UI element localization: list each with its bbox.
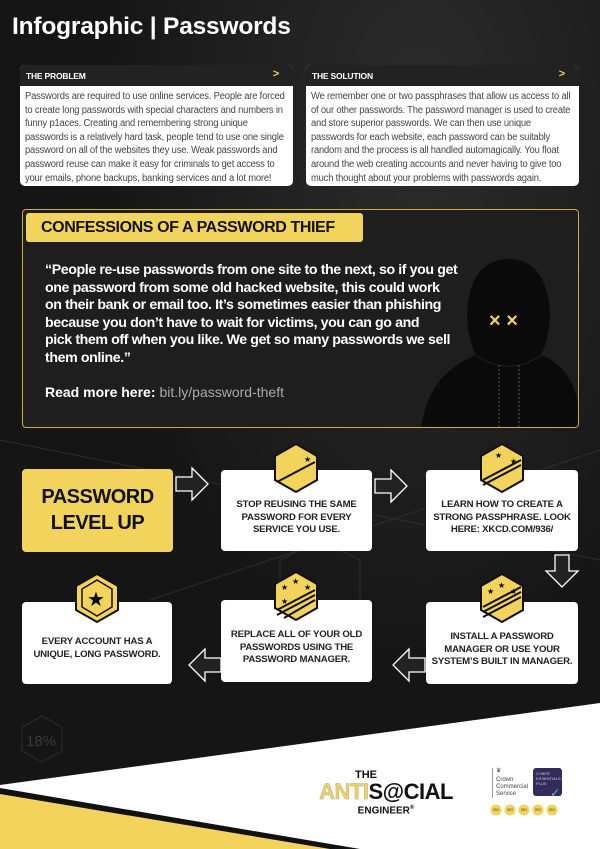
badge 3: ★ (498, 581, 505, 590)
step 5: EVERY ACCOUNT HAS A (42, 636, 152, 647)
problem header: > (273, 68, 279, 80)
problem text (25, 91, 285, 184)
read more link: Read more here: bit.ly/password-theft (45, 384, 284, 400)
step 5: UNIQUE, LONG PASSWORD. (33, 648, 161, 660)
badge 4: ★ (281, 597, 288, 606)
solution text: We remember one or two passphrases that allow us access to all (311, 91, 570, 102)
quote text (45, 262, 458, 366)
quote text: on their bank or email too. It’s sometimes easier than phishing (45, 297, 441, 313)
quote text: “People re-use passwords from one site to the next, so if you get (45, 262, 457, 278)
solution header: THE SOLUTION (312, 71, 373, 81)
step 1 (221, 470, 372, 551)
step 3: INSTALL A PASSWORD (450, 631, 554, 642)
iso badges: ISO (535, 808, 541, 812)
logo: cyber essentials plus (533, 768, 562, 796)
problem text: passwords is a relatively hard task, people tend to use one single (25, 132, 284, 143)
problem text: to create long passwords with special characters and numbers in (25, 105, 283, 116)
logo: crown commercial service: ♛ (496, 768, 501, 774)
badge 4: ★ (292, 577, 299, 586)
badge 2 (481, 444, 523, 492)
badge 3: ★ (510, 587, 517, 596)
confession heading (26, 213, 363, 242)
solution text: much thought about your problems with passwords again. (311, 173, 541, 184)
password level up box: LEVEL UP (51, 512, 144, 534)
title: Infographic | Passwords (12, 13, 291, 40)
logo: the antisocial engineer: ANTIS@CIAL (319, 779, 453, 804)
step 1: STOP REUSING THE SAME (236, 499, 357, 510)
arrow left 2 (189, 649, 221, 681)
problem text: password on all of the websites they use. Weak passwords and (25, 145, 277, 156)
badge 2: ★ (510, 457, 517, 466)
step 4: REPLACE ALL OF YOUR OLD (231, 629, 362, 640)
step 3: SYSTEM’S BUILT IN MANAGER. (432, 656, 572, 667)
badge 4 (275, 572, 317, 620)
step 2: LEARN HOW TO CREATE A (441, 499, 563, 510)
step 1: PASSWORD FOR EVERY (242, 512, 351, 522)
step 5 (22, 602, 172, 684)
confession heading: CONFESSIONS OF A PASSWORD THIEF (41, 219, 335, 236)
problem header: THE PROBLEM (26, 71, 86, 81)
solution text: random and the process is all handled automagically. You float (311, 145, 559, 156)
quote text: pick them off when you like. We get so many passwords we sell (45, 332, 450, 348)
logo: the antisocial engineer: ENGINEER® (358, 805, 414, 816)
iso badges (490, 804, 558, 816)
arrow down (546, 555, 578, 587)
logo: crown commercial service: Commercial (496, 784, 528, 790)
badge 1: ★ (304, 455, 311, 464)
step 2 (426, 470, 578, 551)
logo: cyber essentials plus: CYBER (536, 771, 550, 776)
step 4: PASSWORDS USING THE (240, 642, 353, 652)
logo: crown commercial service (492, 768, 528, 798)
logo: crown commercial service: Crown (496, 777, 513, 783)
step 4 (221, 600, 372, 682)
badge 3: ★ (487, 587, 494, 596)
panel: confessions of a password thief (22, 209, 579, 428)
logo: crown commercial service: Service (496, 791, 516, 797)
step 1: SERVICE YOU USE. (253, 524, 340, 535)
quote text: one password from some old hacked website, this could work (45, 280, 440, 296)
badge 4: ★ (304, 583, 311, 592)
solution text (311, 91, 570, 184)
solution text: around the web creating accounts and never having to give too (311, 159, 561, 170)
problem text: Passwords are required to use online services. People are forced (25, 91, 285, 102)
logo: the antisocial engineer: THE (355, 769, 377, 781)
solution text: passwords for each website, each password can be suitably (311, 132, 550, 143)
solution header: > (559, 68, 565, 80)
badge 1 (275, 444, 317, 492)
iso badges: ISO (507, 808, 513, 812)
icon: hooded hacker: × × (489, 310, 518, 332)
solution text: of our other passwords. The password manager is used to create (311, 105, 570, 116)
problem text: your emails, phone backups, banking services and a lot more! (25, 173, 271, 184)
icon: hooded hacker (422, 258, 578, 427)
badge 4: ★ (281, 583, 288, 592)
problem header (20, 65, 293, 86)
arrow right 1 (176, 468, 208, 500)
logo: cyber essentials plus: ESSENTIALS (536, 776, 561, 781)
iso badges: ISO (549, 808, 555, 812)
arrow right 2 (375, 470, 407, 502)
badge 5: ★ (87, 589, 105, 611)
panel: the problem (20, 65, 293, 186)
badge 3 (481, 574, 523, 622)
badge 2: ★ (495, 451, 502, 460)
badge 5 (76, 574, 118, 622)
iso badges: ISO (521, 808, 527, 812)
problem text: funny p1aces. Creating and remembering strong unique (25, 118, 248, 129)
background decoration: 18% (26, 733, 56, 750)
panel: the solution (306, 65, 579, 186)
quote text: because you don’t have to wait for victims, you can go and (45, 315, 419, 331)
step 3: MANAGER OR USE YOUR (444, 644, 560, 654)
logo: the antisocial engineer (319, 769, 453, 816)
step 3 (426, 602, 578, 684)
password level up box: PASSWORD (41, 486, 154, 508)
solution text: and store superior passwords. We can then use unique (311, 118, 531, 129)
logo: cyber essentials plus: ✓ (550, 786, 560, 800)
problem text: password reuse can make it easy for criminals to get access to (25, 159, 275, 170)
iso badges: ISO (493, 808, 499, 812)
quote text: them online.” (45, 350, 130, 366)
solution header (306, 65, 579, 86)
password level up box (22, 469, 173, 552)
step 2: HERE: XKCD.COM/936/ (451, 524, 553, 535)
step 2: STRONG PASSPHRASE. LOOK (433, 512, 571, 522)
arrow left 1 (393, 649, 425, 681)
step 4: PASSWORD MANAGER. (243, 654, 350, 665)
logo: cyber essentials plus: PLUS (536, 781, 546, 786)
